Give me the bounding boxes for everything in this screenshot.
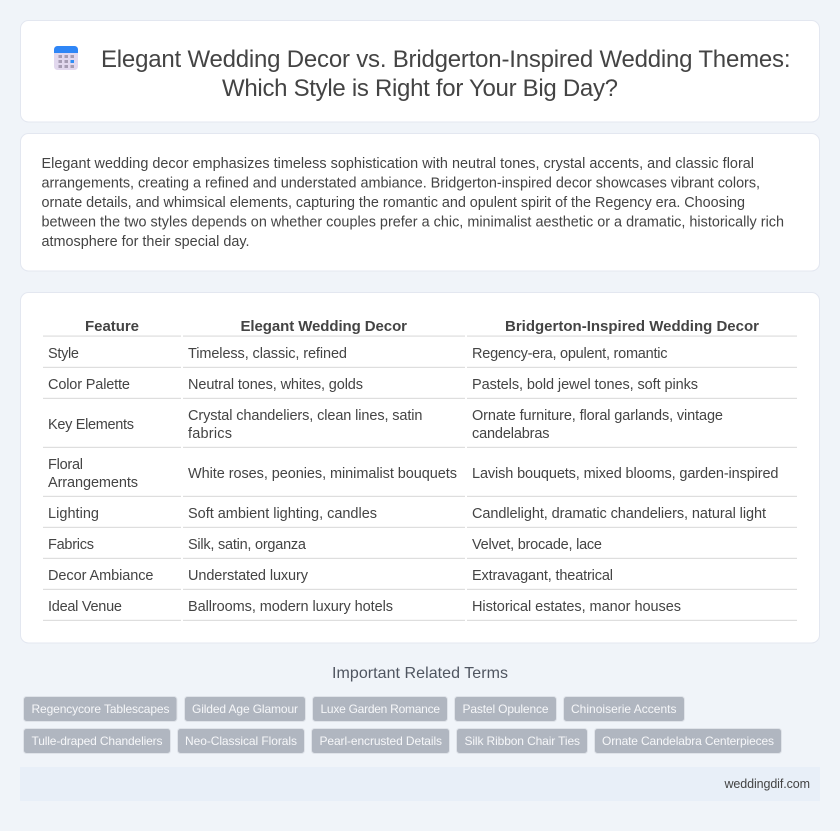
title: Elegant Wedding Decor vs. Bridgerton-Inspired Wedding Themes: [101,46,790,73]
title [101,46,790,102]
row: floral arrangements [48,457,778,491]
icon: calendar [54,46,78,70]
footer: weddingdif.com [724,777,810,791]
tag [564,696,684,722]
tag [312,696,448,722]
panel: comparison table [20,292,820,643]
tag: Pearl-encrusted Details [320,734,442,748]
tag: Chinoiserie Accents [571,702,676,716]
tag [312,728,450,754]
intro text: between the two styles depends on whether couples prefer a chic, minimalist aesthetic or a dramatic, historically rich [42,214,784,230]
row: lighting: Soft ambient lighting, candles [188,506,377,522]
row: color palette: Pastels, bold jewel tones, soft pinks [472,377,698,393]
table header row: Feature [85,318,139,335]
intro text: atmosphere for their special day. [42,234,250,250]
row: floral arrangements: Arrangements [48,475,138,491]
row: key elements: Key Elements [48,417,134,433]
tag: Silk Ribbon Chair Ties [464,734,580,748]
row: ideal venue: Ideal Venue [48,599,122,615]
intro text: arrangements, creating a refined and understated ambiance. Bridgerton-inspired decor showcases vibrant colors, [42,176,760,192]
row: ideal venue [48,599,681,615]
tag: Pastel Opulence [462,702,549,716]
panel: title header [20,20,820,122]
row: style: Regency-era, opulent, romantic [472,346,668,362]
row: lighting: Candlelight, dramatic chandeliers, natural light [472,506,766,522]
row: color palette: Neutral tones, whites, golds [188,377,363,393]
tag: Ornate Candelabra Centerpieces [602,734,774,748]
tag [24,728,170,754]
row: ideal venue: Ballrooms, modern luxury hotels [188,599,393,615]
row: key elements: fabrics [188,426,232,442]
row: color palette [48,377,698,393]
tag [24,696,177,722]
row: key elements: Ornate furniture, floral garlands, vintage [472,408,723,424]
row: lighting: Lighting [48,506,99,522]
tag [454,696,556,722]
row: color palette: Color Palette [48,377,130,393]
row: fabrics: Silk, satin, organza [188,537,307,553]
row: decor ambiance [48,568,613,584]
row: key elements: Crystal chandeliers, clean lines, satin [188,408,422,424]
intro text [42,156,784,250]
row: style: Timeless, classic, refined [188,346,347,362]
intro text: Elegant wedding decor emphasizes timeless sophistication with neutral tones, crystal accents, and classic floral [42,156,754,172]
row: decor ambiance: Extravagant, theatrical [472,568,613,584]
tag [184,696,306,722]
row: decor ambiance: Understated luxury [188,568,309,584]
related term tags [24,696,782,754]
tag: Tulle-draped Chandeliers [32,734,162,748]
table header row [85,318,759,335]
heading: important related terms: Important Related Terms [332,665,508,682]
tag: Regencycore Tablescapes [32,702,170,716]
row: floral arrangements: Floral [48,457,83,473]
tag [456,728,588,754]
row: style: Style [48,346,79,362]
row: decor ambiance: Decor Ambiance [48,568,154,584]
row: key elements: candelabras [472,426,550,442]
tag: Gilded Age Glamour [192,702,298,716]
tag [594,728,782,754]
row: fabrics: Fabrics [48,537,94,553]
row: fabrics [48,537,602,553]
row: key elements [48,408,723,442]
panel: intro paragraph [20,134,820,271]
intro text: ornate details, and whimsical elements, capturing the romantic and opulent spirit of the Regency era. Choosing [42,195,745,211]
row: floral arrangements: Lavish bouquets, mixed blooms, garden-inspired [472,466,778,482]
tag: Neo-Classical Florals [185,734,297,748]
tag [178,728,304,754]
footer [20,767,820,801]
tag: Luxe Garden Romance [320,702,440,716]
row: ideal venue: Historical estates, manor houses [472,599,681,615]
row: floral arrangements: White roses, peonies, minimalist bouquets [188,466,457,482]
row: fabrics: Velvet, brocade, lace [472,537,602,553]
title: Which Style is Right for Your Big Day? [222,75,618,102]
table header row: Bridgerton-Inspired Wedding Decor [505,318,759,335]
row: lighting [48,506,766,522]
row: style [48,346,668,362]
table header row: Elegant Wedding Decor [240,318,407,335]
